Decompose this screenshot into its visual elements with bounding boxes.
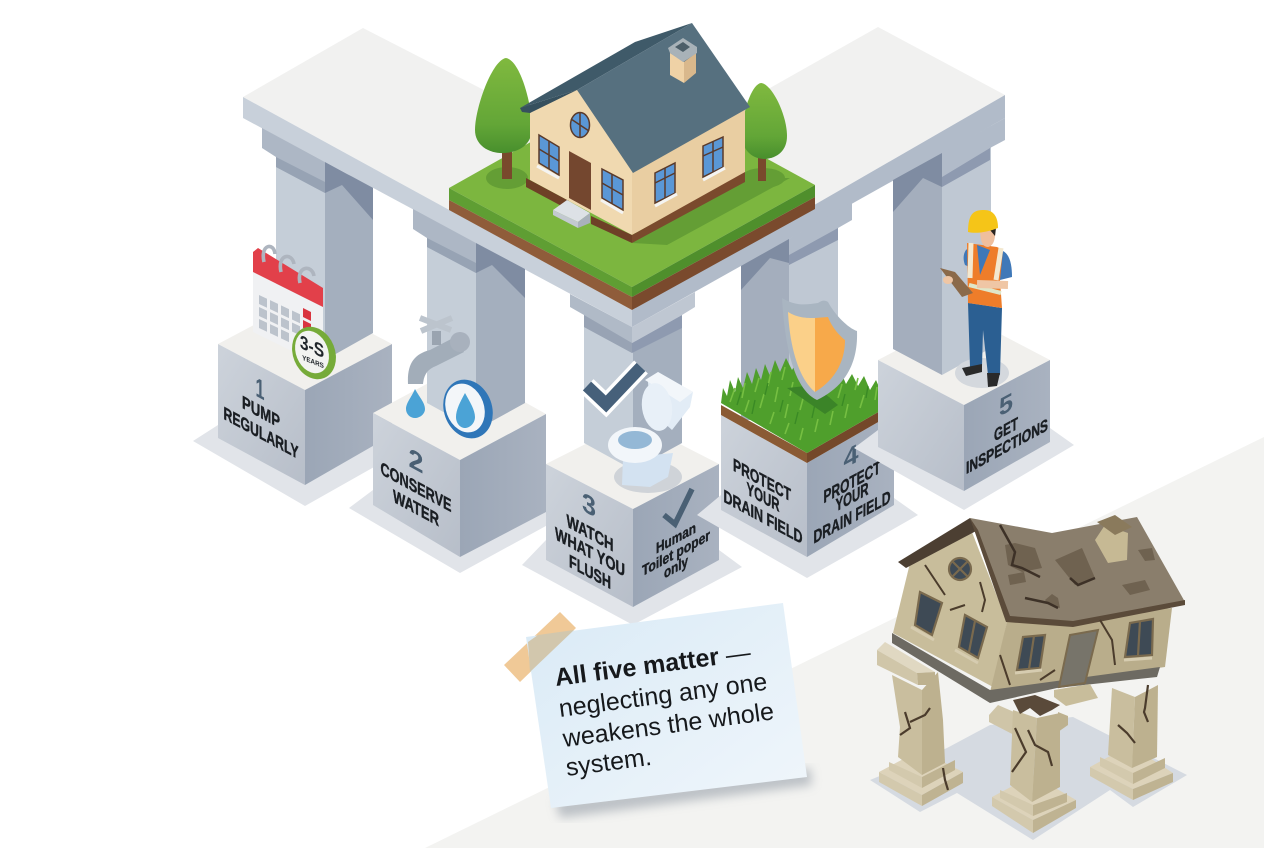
pillar 5 label: 5 bbox=[999, 387, 1013, 422]
roof bbox=[520, 23, 750, 173]
left tree bbox=[475, 58, 532, 179]
pillar 2 label: CONSERVE bbox=[380, 459, 452, 517]
ruined door bbox=[1059, 630, 1098, 687]
icon: shield bbox=[782, 298, 857, 400]
check mark fill bbox=[587, 367, 641, 404]
icon: check mark bbox=[587, 367, 641, 404]
pillar 4 right label: PROTECT bbox=[823, 458, 881, 508]
front pillar bbox=[992, 695, 1076, 833]
pillar 4 left label: DRAIN FIELD bbox=[724, 487, 803, 549]
icon: water drop bbox=[406, 389, 425, 418]
pillar 5 label: GET bbox=[994, 414, 1018, 445]
ground shadow bbox=[870, 717, 1187, 840]
icon: toilet bbox=[608, 372, 693, 493]
pillar 4 right label bbox=[814, 437, 891, 548]
tape overlap bbox=[528, 630, 574, 672]
icon: 3-5 years badge: YEARS bbox=[302, 355, 324, 370]
ruined steps bbox=[1054, 684, 1098, 706]
worker bbox=[940, 210, 1012, 388]
pillar 4 left label bbox=[724, 455, 803, 549]
pillar 3 label: WATCH bbox=[566, 511, 614, 556]
icon: faucet bbox=[408, 318, 470, 384]
platform with house bbox=[449, 23, 815, 310]
pillar 3 label: WHAT YOU bbox=[555, 524, 625, 582]
pillar 5: get inspections bbox=[854, 125, 1074, 510]
grass platform bbox=[449, 85, 815, 310]
left pillar bbox=[877, 642, 963, 806]
windows bbox=[539, 112, 723, 210]
ruined roof bbox=[898, 517, 1185, 627]
note text: All five matter — bbox=[553, 638, 752, 692]
icon: 3-5 years badge bbox=[284, 320, 344, 386]
right tree bbox=[742, 83, 787, 181]
ruined chimney bbox=[1095, 515, 1132, 563]
pillar 1 label bbox=[224, 372, 299, 464]
back pillar bbox=[989, 705, 1068, 738]
note text: weakens the whole bbox=[560, 697, 776, 753]
pillar 4 right label: 4 bbox=[844, 437, 859, 475]
pillar 1: pump regularly bbox=[193, 140, 420, 506]
pillar 1 label: PUMP bbox=[242, 393, 280, 433]
wall cracks bbox=[925, 565, 1115, 685]
pillar 2: conserve water bbox=[349, 220, 575, 573]
pillar 2 label bbox=[380, 443, 452, 531]
pillar 4 right label: DRAIN FIELD bbox=[814, 487, 891, 548]
note text: system. bbox=[564, 743, 653, 782]
window sills bbox=[537, 166, 725, 213]
tape bbox=[504, 612, 576, 682]
pillar 2 label: 2 bbox=[408, 443, 424, 481]
ruined house bbox=[870, 515, 1187, 840]
pillar 3: watch what you flush bbox=[522, 320, 742, 625]
ruined windows bbox=[915, 558, 1153, 670]
steps bbox=[553, 200, 590, 228]
pillar 2 label: WATER bbox=[393, 487, 439, 531]
note text: neglecting any one bbox=[557, 668, 769, 723]
pillar 4 left label: YOUR bbox=[746, 479, 780, 517]
pillar 1 label: 1 bbox=[256, 372, 264, 407]
pillar 3 label bbox=[555, 487, 625, 594]
chimney bbox=[668, 38, 697, 83]
pillar 5 label bbox=[966, 387, 1048, 478]
pillar 4 left label: PROTECT bbox=[733, 455, 791, 506]
pillar 4: protect your drain field bbox=[697, 225, 918, 578]
beam bbox=[243, 27, 1005, 353]
pillar 3 side note bbox=[642, 489, 710, 582]
door bbox=[569, 151, 591, 210]
right pillar bbox=[1090, 685, 1173, 800]
pillar 3 side note: only bbox=[664, 552, 688, 582]
ruined sills bbox=[911, 627, 1152, 673]
pillar 1 label: REGULARLY bbox=[223, 404, 299, 464]
icon: 3-5 years badge: 3-S bbox=[300, 331, 324, 362]
house walls bbox=[526, 88, 745, 243]
grass top bbox=[721, 358, 894, 463]
pillar 3 label: 3 bbox=[582, 487, 596, 524]
note text bbox=[553, 638, 776, 782]
pillar 5 label: INSPECTIONS bbox=[966, 415, 1048, 478]
ruined walls bbox=[892, 527, 1172, 703]
pillar 3 side note: Toilet poper bbox=[642, 527, 710, 580]
sticky note bbox=[526, 603, 812, 818]
icon: water badge bbox=[435, 373, 501, 445]
pillar 3 label: FLUSH bbox=[569, 552, 611, 594]
pillar 3 side note: Human bbox=[656, 519, 696, 558]
pillar 4 right label: YOUR bbox=[836, 479, 869, 517]
icon: calendar bbox=[253, 246, 323, 355]
